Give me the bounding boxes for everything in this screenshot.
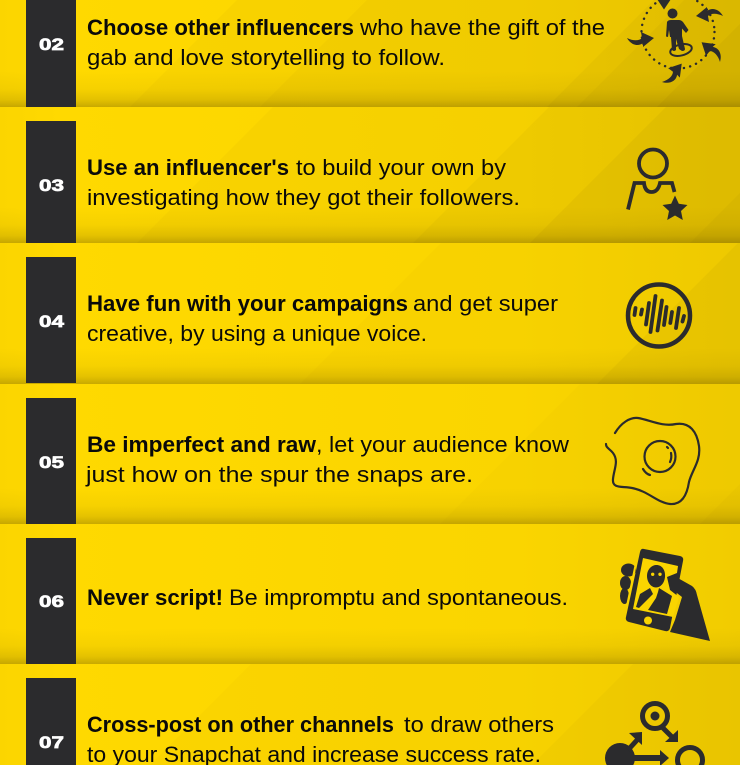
number block 06 bbox=[26, 538, 76, 664]
icon: fried egg bbox=[606, 418, 699, 504]
icon: connected nodes with arrows bbox=[605, 704, 702, 765]
text: tip 06: Be impromptu and spontaneous. bbox=[229, 585, 568, 610]
number block 07 bbox=[26, 678, 76, 765]
number block 04 bbox=[26, 257, 76, 383]
number block 02 bbox=[26, 0, 76, 107]
icon: sound wave circle bbox=[628, 284, 690, 346]
text: tip 03: to build your own by bbox=[296, 155, 506, 180]
panel: tip 04 bbox=[0, 243, 740, 384]
text: tip 04 bbox=[87, 291, 558, 346]
text: tip 03: investigating how they got their followers. bbox=[87, 185, 520, 210]
icon: person surrounded by arrows bbox=[627, 0, 727, 89]
text: tip 03 bbox=[87, 155, 520, 210]
text: tip 06: Never script! bbox=[87, 585, 223, 610]
text: tip 05 bbox=[85, 432, 569, 487]
text: tip 07: Cross-post on other channels bbox=[87, 712, 394, 737]
text: tip 06 bbox=[87, 585, 568, 610]
panel: tip 05 bbox=[0, 384, 740, 524]
panel: tip 06 bbox=[0, 524, 740, 664]
text: tip 05: Be imperfect and raw bbox=[87, 432, 317, 457]
text: tip 04: Have fun with your campaigns bbox=[87, 291, 408, 316]
panel: tip 03 bbox=[0, 107, 740, 243]
number block 03: 03 bbox=[39, 176, 64, 195]
number block 05: 05 bbox=[39, 453, 64, 472]
icon: user with star bbox=[628, 150, 688, 220]
text: tip 07 bbox=[87, 712, 554, 765]
number block 03 bbox=[26, 121, 76, 243]
number block 02: 02 bbox=[39, 35, 64, 54]
number block 07: 07 bbox=[39, 733, 64, 752]
text: tip 04: and get super bbox=[413, 291, 558, 316]
text: tip 02 bbox=[87, 15, 605, 70]
text: tip 02: Choose other influencers bbox=[87, 15, 354, 40]
text: tip 04: creative, by using a unique voice. bbox=[87, 321, 427, 346]
number block 04: 04 bbox=[39, 312, 65, 331]
icon: hand holding phone with selfie bbox=[620, 549, 710, 641]
number block 06: 06 bbox=[39, 592, 64, 611]
text: tip 05: just how on the spur the snaps are. bbox=[85, 462, 473, 487]
panel: tip 07 bbox=[0, 664, 740, 765]
panel: tip 02 bbox=[0, 0, 740, 107]
text: tip 03: Use an influencer's bbox=[87, 155, 289, 180]
text: tip 02: who have the gift of the bbox=[359, 15, 605, 40]
text: tip 02: gab and love storytelling to follow. bbox=[87, 45, 445, 70]
number block 05 bbox=[26, 398, 76, 524]
text: tip 05: , let your audience know bbox=[316, 432, 569, 457]
text: tip 07: to draw others bbox=[404, 712, 554, 737]
